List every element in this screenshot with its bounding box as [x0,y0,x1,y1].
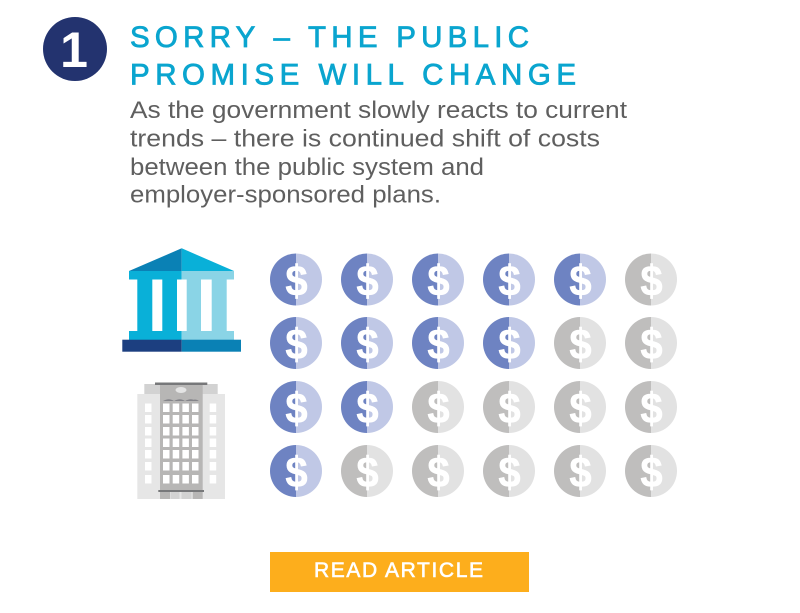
intro text: employer-sponsored plans. [130,182,441,209]
number badge: 1 [60,22,88,78]
intro text: trends – there is continued shift of costs [130,126,600,153]
icon: government building [122,248,241,352]
intro text [130,97,627,209]
intro text: between the public system and [130,154,484,181]
intro text: As the government slowly reacts to current [130,97,627,124]
title [130,21,576,92]
title: PROMISE WILL CHANGE [130,58,576,92]
title: SORRY – THE PUBLIC [130,21,529,54]
read article button: READ ARTICLE [314,559,483,582]
read article button [270,552,529,592]
dollar coin grid [270,254,677,497]
icon: corporate tower [137,382,225,499]
number badge [43,17,107,81]
